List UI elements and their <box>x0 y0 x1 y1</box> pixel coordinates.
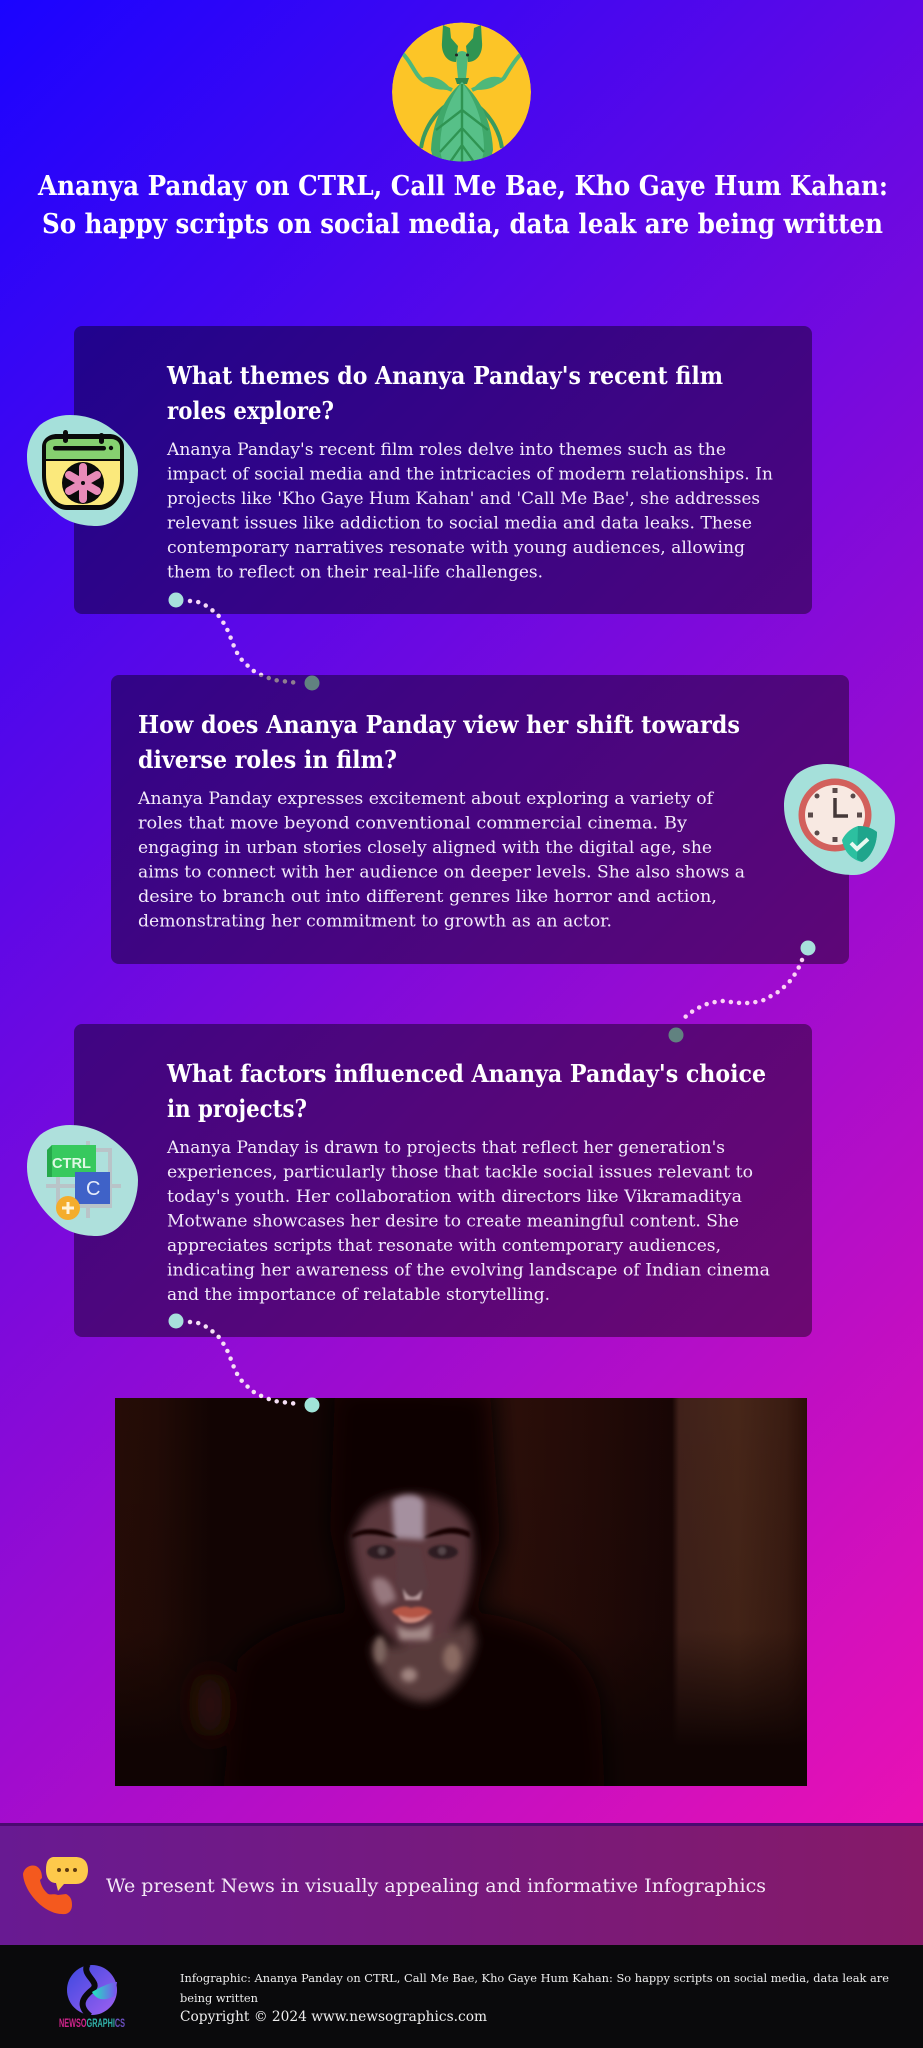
arrow: connector two <box>668 940 816 1042</box>
logo: newsographics <box>59 1964 125 2030</box>
text: credits: Infographic: Ananya Panday on CTRL, Call Me Bae, Kho Gaye Hum Kahan: So happy scripts on social media, data leak are <box>180 1971 889 1985</box>
text block: factors <box>166 1138 770 1304</box>
panel: diverse roles <box>111 675 849 964</box>
heading: factors: What factors influenced Ananya Panday's choice <box>166 1059 766 1088</box>
text block: diverse roles: engaging in urban stories closely aligned with the digital age, she <box>138 838 712 857</box>
text: credits: Copyright © 2024 www.newsographics.com <box>180 2009 487 2025</box>
icon: ctrl c keys <box>27 1125 138 1236</box>
footer <box>0 1945 923 2048</box>
icon: ctrl c keys: CTRL <box>52 1155 91 1172</box>
text block: themes: Ananya Panday's recent film roles delve into themes such as the <box>166 440 726 459</box>
arrow: connector three <box>168 1314 320 1412</box>
icon: ctrl c keys: C <box>86 1178 100 1200</box>
text block: diverse roles: desire to branch out into different genres like horror and action, <box>138 887 717 906</box>
icon: leaf insect in yellow circle <box>392 22 531 170</box>
text block: factors: Motwane showcases her desire to create meaningful content. She <box>167 1212 739 1230</box>
text block: themes: them to reflect on their real-life challenges. <box>167 562 543 582</box>
panel: themes <box>74 326 812 614</box>
text block: factors: indicating her awareness of the evolving landscape of Indian cinema <box>167 1260 770 1280</box>
heading: themes: roles explore? <box>167 396 334 425</box>
text: credits <box>180 1971 889 2025</box>
text block: diverse roles: roles that move beyond conventional commercial cinema. By <box>138 814 688 832</box>
band: tagline <box>0 1823 923 1945</box>
text block: themes: relevant issues like addiction to social media and data leaks. These <box>167 514 752 532</box>
icon: clock with check badge <box>784 764 895 875</box>
text block: diverse roles <box>137 789 745 930</box>
heading: diverse roles <box>138 710 740 774</box>
text block: themes <box>166 440 773 582</box>
heading: factors: in projects? <box>167 1094 307 1123</box>
text block: themes: projects like 'Kho Gaye Hum Kahan' and 'Call Me Bae', she addresses <box>167 489 760 508</box>
text block: diverse roles: Ananya Panday expresses excitement about exploring a variety of <box>137 789 715 808</box>
heading: factors <box>166 1059 766 1123</box>
text block: factors: today's youth. Her collaboration with directors like Vikramaditya <box>167 1187 742 1206</box>
text block: diverse roles: demonstrating her commitment to growth as an actor. <box>138 912 612 930</box>
panel: factors <box>74 1024 812 1337</box>
heading: themes: What themes do Ananya Panday's recent film <box>166 361 723 390</box>
heading: diverse roles: diverse roles in film? <box>138 745 397 774</box>
text block: themes: contemporary narratives resonate with young audiences, allowing <box>167 538 745 557</box>
photo: woman lit by a screen in a dark room <box>115 1390 807 1800</box>
heading: diverse roles: How does Ananya Panday view her shift towards <box>138 710 740 739</box>
text block: factors: Ananya Panday is drawn to projects that reflect her generation's <box>166 1138 725 1157</box>
heading: themes <box>166 361 723 425</box>
logo: newsographics: NEWSOGRAPHICS <box>59 2016 125 2030</box>
icon: phone with chat bubble <box>23 1857 88 1914</box>
title <box>37 171 888 240</box>
icon: calendar with flower <box>27 415 138 526</box>
text block: factors: appreciates scripts that resonate with contemporary audiences, <box>167 1236 721 1255</box>
text block: themes: impact of social media and the intricacies of modern relationships. In <box>167 464 773 484</box>
text block: factors: experiences, particularly those that tackle social issues relevant to <box>167 1162 753 1182</box>
text block: diverse roles: aims to connect with her audience on deeper levels. She also shows a <box>138 862 745 882</box>
text: tagline: We present News in visually appealing and informative Infographics <box>106 1875 766 1897</box>
text block: factors: and the importance of relatable storytelling. <box>167 1285 550 1304</box>
arrow: connector one <box>168 592 320 690</box>
text: credits: being written <box>180 1991 259 2005</box>
